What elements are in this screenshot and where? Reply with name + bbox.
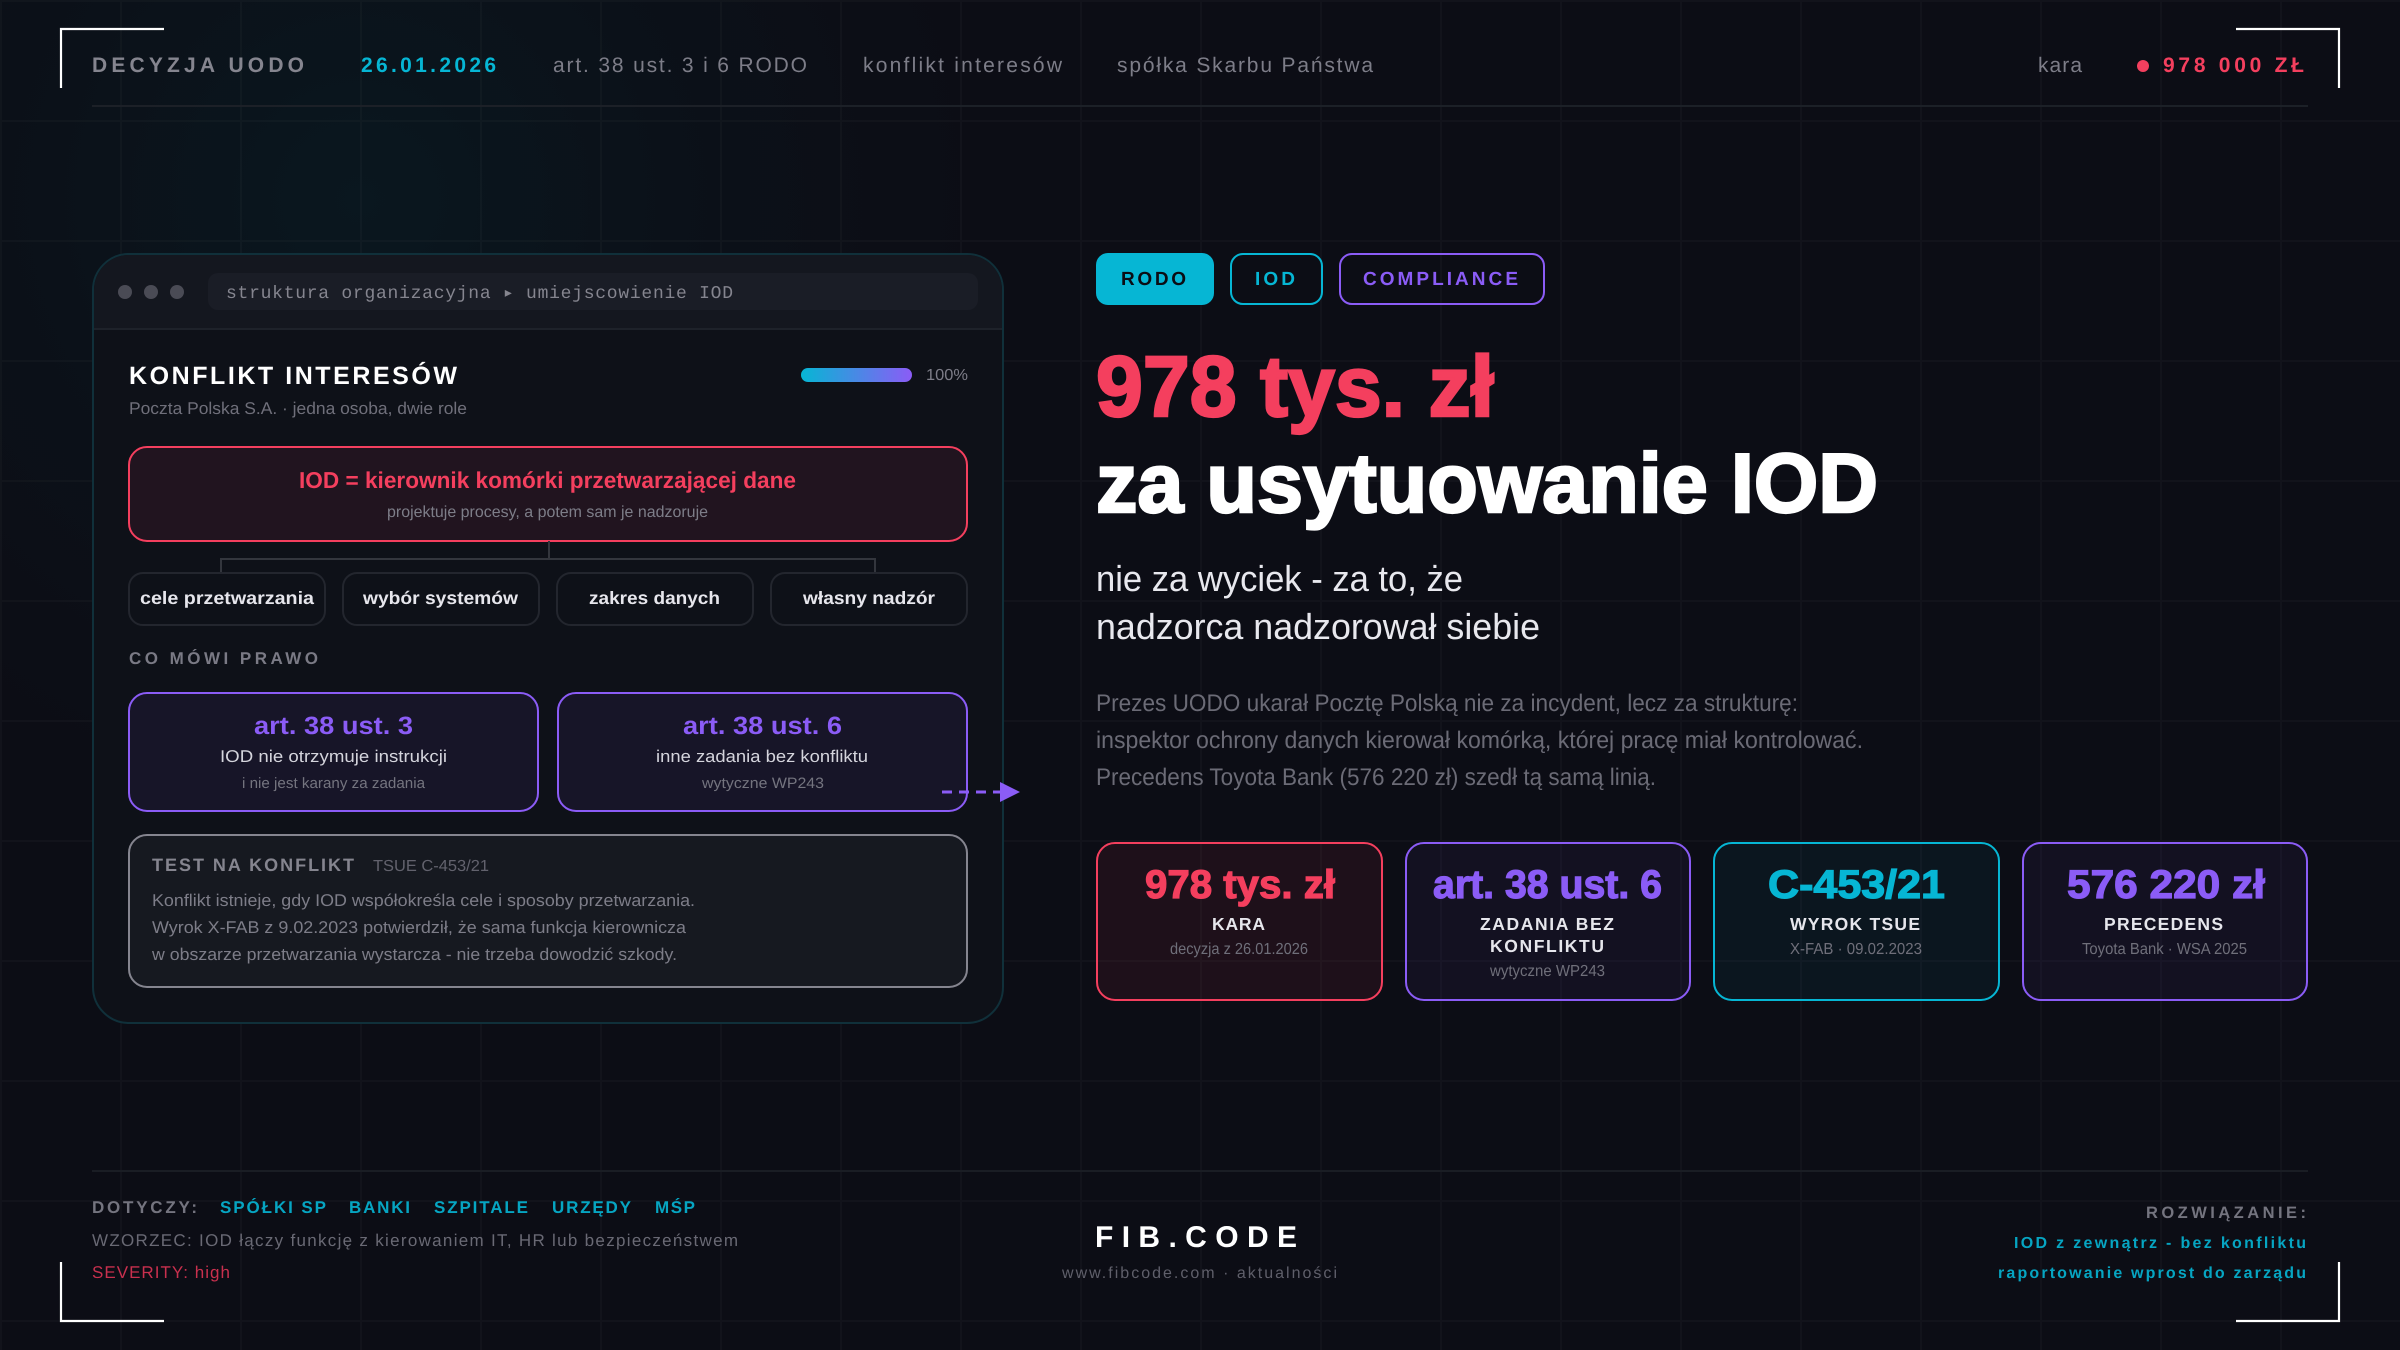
tag: IOD: IOD xyxy=(1255,269,1295,290)
footer center: brand: www.fibcode.com · aktualności xyxy=(1061,1265,1337,1282)
headline xyxy=(1096,339,1878,530)
org connector lines xyxy=(221,541,875,572)
header entity: spółka Skarbu Państwa xyxy=(1117,54,1373,77)
law card: art. 38 ust. 3: IOD nie otrzymuje instrukcji xyxy=(220,747,447,766)
footer left: scope: BANKI xyxy=(349,1198,410,1217)
stat card: zadania bez konfliktu: wytyczne WP243 xyxy=(1489,963,1605,980)
description paragraph: Precedens Toyota Bank (576 220 zł) szedł tą samą linią. xyxy=(1096,764,1656,791)
stat card: kara: 978 tys. zł xyxy=(1145,863,1335,907)
chip: wybór systemów xyxy=(343,573,539,625)
tag: COMPLIANCE xyxy=(1340,254,1544,304)
window title bar: struktura organizacyjna ▸ umiejscowienie IOD xyxy=(226,284,733,304)
stat card: wyrok TSUE: WYROK TSUE xyxy=(1790,914,1920,934)
footer right: solution: IOD z zewnątrz - bez konfliktu xyxy=(2014,1235,2306,1252)
footer center: brand: FIB.CODE xyxy=(1095,1221,1297,1254)
stat card: precedens: 576 220 zł xyxy=(2067,863,2265,907)
test box: test na konflikt xyxy=(129,835,967,987)
footer left: scope: SEVERITY: high xyxy=(92,1263,230,1282)
stat card: kara: decyzja z 26.01.2026 xyxy=(1170,941,1308,958)
chip: wybór systemów: wybór systemów xyxy=(362,588,519,608)
footer left: scope: SZPITALE xyxy=(434,1198,528,1217)
red box: IOD role: IOD = kierownik komórki przetwarzającej dane xyxy=(299,467,796,493)
footer left: scope: WZORZEC: IOD łączy funkcję z kierowaniem IT, HR lub bezpieczeństwem xyxy=(92,1231,738,1250)
stat card: precedens: PRECEDENS xyxy=(2104,914,2223,934)
law card: art. 38 ust. 3 xyxy=(129,693,538,811)
arrow: dashed pointer to headline xyxy=(942,782,1020,802)
law card: art. 38 ust. 6: art. 38 ust. 6 xyxy=(683,712,842,740)
chip: zakres danych: zakres danych xyxy=(589,588,720,608)
stat card: kara xyxy=(1097,843,1382,1000)
footer left: scope: URZĘDY xyxy=(552,1198,632,1217)
chip: własny nadzór: własny nadzór xyxy=(802,588,935,608)
test box: test na konflikt: w obszarze przetwarzania wystarcza - nie trzeba dowodzić szkody. xyxy=(151,945,677,964)
test box: test na konflikt: TSUE C-453/21 xyxy=(373,858,489,875)
header date: 26.01.2026 xyxy=(361,54,496,77)
stat card: kara: KARA xyxy=(1212,914,1265,934)
tag: RODO xyxy=(1096,253,1214,305)
footer left: scope: DOTYCZY: xyxy=(92,1198,197,1217)
header kara label: kara xyxy=(2038,54,2082,77)
header label: decyzja: DECYZJA UODO xyxy=(92,54,304,77)
tags row xyxy=(1096,253,1544,305)
window title bar xyxy=(94,255,1002,330)
header topic: konflikt interesów xyxy=(863,54,1063,77)
headline second line: za usytuowanie IOD xyxy=(1096,436,1878,530)
progress bar: 100% xyxy=(926,367,968,384)
description paragraph: inspektor ochrony danych kierował komórką, której pracę miał kontrolować. xyxy=(1096,727,1863,754)
panel: browser window conflict of interest xyxy=(93,254,1003,1023)
test box: test na konflikt: Wyrok X-FAB z 9.02.2023 potwierdził, że sama funkcja kierownicza xyxy=(152,918,687,937)
headline amount: 978 tys. zł xyxy=(1096,339,1494,435)
stat card: zadania bez konfliktu xyxy=(1406,843,1690,1000)
progress bar xyxy=(801,367,968,384)
law card: art. 38 ust. 6 xyxy=(558,693,967,811)
subheadline xyxy=(1096,558,1540,647)
footer left: scope: MŚP xyxy=(655,1197,695,1217)
footer right: solution xyxy=(1998,1204,2306,1282)
footer left: scope: SPÓŁKI SP xyxy=(220,1197,326,1217)
stat card: precedens: Toyota Bank · WSA 2025 xyxy=(2082,941,2247,958)
footer right: solution: raportowanie wprost do zarządu xyxy=(1998,1265,2306,1282)
stat card: zadania bez konfliktu: art. 38 ust. 6 xyxy=(1433,863,1662,907)
tag: IOD xyxy=(1231,254,1322,304)
law card: art. 38 ust. 3: art. 38 ust. 3 xyxy=(254,712,413,740)
chip: zakres danych xyxy=(557,573,753,625)
stat card: wyrok TSUE: C-453/21 xyxy=(1768,863,1945,907)
chip: cele przetwarzania xyxy=(129,573,325,625)
stat card: zadania bez konfliktu: ZADANIA BEZ xyxy=(1480,914,1614,934)
subheadline: nie za wyciek - za to, że xyxy=(1096,558,1463,599)
law card: art. 38 ust. 6: inne zadania bez konfliktu xyxy=(656,747,868,766)
section label: co mówi prawo: CO MÓWI PRAWO xyxy=(129,648,318,668)
panel heading: KONFLIKT INTERESÓW xyxy=(129,361,457,390)
header bar xyxy=(92,54,2304,77)
law card: art. 38 ust. 3: i nie jest karany za zadania xyxy=(242,775,426,792)
description paragraph: Prezes UODO ukarał Pocztę Polską nie za incydent, lecz za strukturę: xyxy=(1096,690,1798,717)
red box: IOD role: projektuje procesy, a potem sam je nadzoruje xyxy=(387,504,708,521)
tag: RODO: RODO xyxy=(1121,269,1186,290)
footer left: scope xyxy=(92,1197,738,1282)
stat card: wyrok TSUE xyxy=(1714,843,1999,1000)
footer center: brand xyxy=(1061,1221,1337,1282)
panel subheading: Poczta Polska S.A. · jedna osoba, dwie role xyxy=(129,399,467,418)
subheadline: nadzorca nadzorował siebie xyxy=(1096,606,1540,647)
chip: własny nadzór xyxy=(771,573,967,625)
header legal basis: art. 38 ust. 3 i 6 RODO xyxy=(553,54,807,77)
footer right: solution: ROZWIĄZANIE: xyxy=(2146,1204,2306,1222)
chip: cele przetwarzania: cele przetwarzania xyxy=(140,588,315,608)
test box: test na konflikt: Konflikt istnieje, gdy IOD współokreśla cele i sposoby przetwarzania. xyxy=(152,891,695,910)
description paragraph xyxy=(1096,690,1863,791)
tag: COMPLIANCE: COMPLIANCE xyxy=(1363,269,1518,290)
law card: art. 38 ust. 6: wytyczne WP243 xyxy=(701,775,824,792)
stat card: wyrok TSUE: X-FAB · 09.02.2023 xyxy=(1790,941,1922,958)
stat card: zadania bez konfliktu: KONFLIKTU xyxy=(1490,936,1604,956)
red box: IOD role xyxy=(129,447,967,541)
test box: test na konflikt: TEST NA KONFLIKT xyxy=(152,855,354,875)
header red dot xyxy=(2137,60,2149,72)
header amount: 978 000 ZŁ xyxy=(2163,54,2304,77)
stat card: precedens xyxy=(2023,843,2307,1000)
